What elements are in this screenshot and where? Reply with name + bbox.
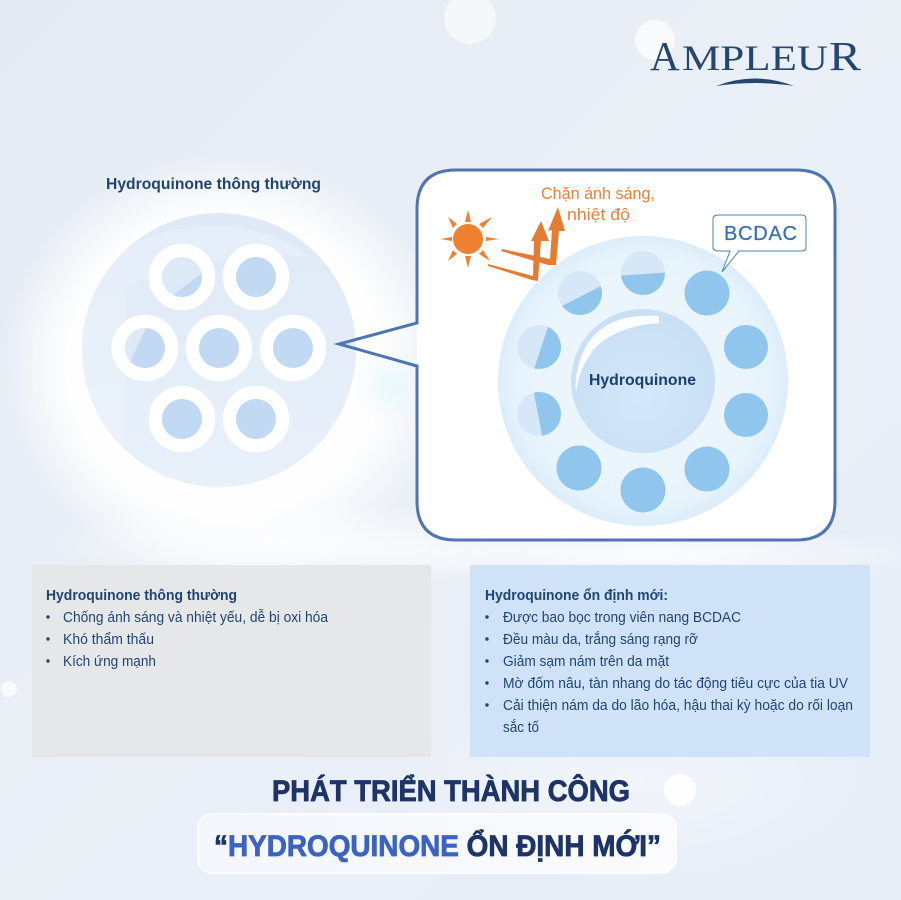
molecule: top right: [230, 250, 282, 304]
arrows: reflected light: [488, 207, 565, 281]
bullet list: [46, 609, 329, 670]
label: blocks light and heat: [541, 185, 655, 224]
logo: Ampleur: A: [650, 33, 680, 79]
panel: callout bubble: [339, 170, 835, 540]
logo: Ampleur: [650, 33, 862, 86]
panel heading: Hydroquinone ổn định mới:: [485, 587, 668, 604]
icon: sun: [440, 210, 499, 268]
molecule: bottom right: [230, 392, 282, 446]
logo: Ampleur: R: [829, 33, 862, 79]
label: BCDAC callout: BCDAC: [724, 223, 797, 245]
label: blocks light and heat: Chặn ánh sáng,: [541, 185, 655, 203]
bullet list: Đều màu da, trắng sáng rạng rỡ: [503, 631, 698, 648]
diagram: conventional hydroquinone: [82, 213, 356, 487]
bullet list: Kích ứng mạnh: [63, 653, 156, 670]
bullet list: Giảm sạm nám trên da mặt: [503, 653, 670, 670]
title highlight pill: [198, 814, 676, 873]
bullet list: Mờ đốm nâu, tàn nhang do tác động tiêu cực của tia UV: [503, 675, 848, 692]
molecule: bottom left: [156, 392, 208, 446]
BCDAC beads: [517, 251, 768, 512]
diagram: BCDAC capsule: [498, 236, 788, 526]
bullet list: Chống ánh sáng và nhiệt yếu, dễ bị oxi hóa: [63, 609, 329, 626]
bullet list: sắc tố: [503, 719, 540, 736]
label: blocks light and heat: nhiệt độ: [567, 206, 630, 224]
bullet list: [485, 609, 853, 736]
title: PHÁT TRIỂN THÀNH CÔNG: [272, 774, 630, 808]
molecule: top left: [156, 250, 208, 304]
hydroquinone core: [571, 309, 715, 453]
panel heading: Hydroquinone thông thường: [46, 587, 237, 604]
molecule: centre: [192, 322, 246, 374]
molecule: middle left: [118, 322, 172, 374]
panel: new stable hydroquinone: [470, 565, 870, 757]
heading: left capsule: Hydroquinone thông thường: [106, 176, 321, 193]
label: BCDAC callout: [713, 215, 806, 272]
hydroquinone core: Hydroquinone: [589, 372, 696, 389]
panel: conventional hydroquinone: [32, 565, 431, 757]
bullet list: Khó thẩm thấu: [63, 631, 154, 648]
logo: Ampleur: MPLEU: [682, 38, 828, 78]
molecule: middle right: [266, 322, 320, 374]
bullet list: Cải thiện nám da do lão hóa, hậu thai kỳ hoặc do rối loạn: [503, 697, 853, 714]
bullet list: Được bao bọc trong viên nang BCDAC: [503, 609, 741, 626]
title highlight pill: “HYDROQUINONE ỔN ĐỊNH MỚI”: [214, 829, 661, 863]
